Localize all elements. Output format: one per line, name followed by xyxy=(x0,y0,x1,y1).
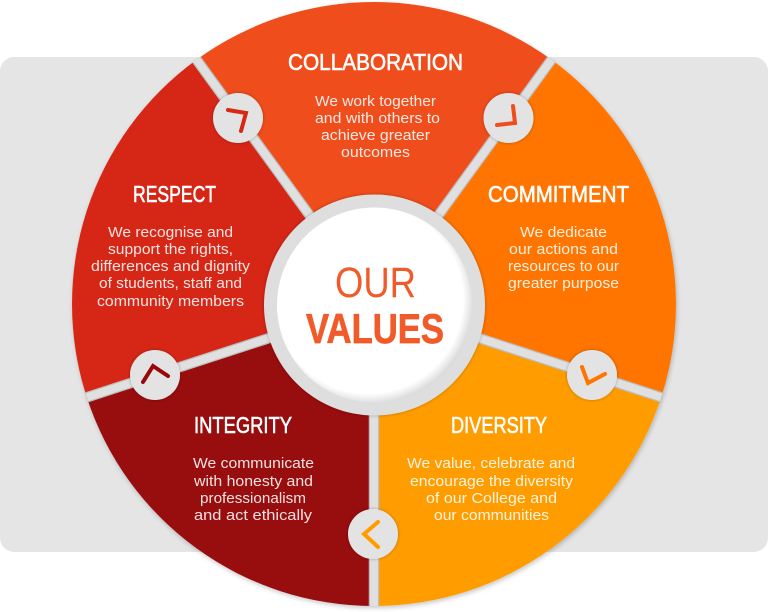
segment: collaboration xyxy=(196,2,552,304)
segment: diversity xyxy=(374,304,661,606)
text block: diversity: of our College and xyxy=(426,491,557,507)
text block: diversity: DIVERSITY xyxy=(451,412,547,438)
text block: collaboration: COLLABORATION xyxy=(288,49,463,75)
text block: commitment: resources to our xyxy=(508,259,619,275)
text block: respect: community members xyxy=(97,294,244,310)
text block: collaboration xyxy=(288,49,463,161)
text block: respect xyxy=(91,181,251,310)
hub title: VALUES xyxy=(306,305,444,352)
segment: commitment xyxy=(374,60,676,397)
text block: respect: support the rights, xyxy=(108,242,233,258)
text block: diversity: We value, celebrate and xyxy=(407,456,575,472)
spoke dividers xyxy=(84,58,664,610)
hub title xyxy=(306,259,444,352)
text block: respect: differences and dignity xyxy=(91,259,251,275)
text block: integrity: with honesty and xyxy=(193,474,313,490)
hub title: OUR xyxy=(335,259,416,307)
text block: commitment: our actions and xyxy=(509,242,618,258)
text block: integrity: professionalism xyxy=(200,491,306,507)
connector: diversity to integrity xyxy=(348,509,398,559)
connector: commitment to diversity xyxy=(567,350,617,400)
segment backgrounds xyxy=(72,2,676,606)
text block: respect: of students, staff and xyxy=(99,276,242,292)
connector: respect to collaboration xyxy=(213,93,263,143)
connector: collaboration to commitment xyxy=(484,93,534,143)
text block: diversity xyxy=(407,412,575,524)
text block: commitment: greater purpose xyxy=(508,276,619,292)
text block: integrity: INTEGRITY xyxy=(194,412,292,438)
text block: commitment: COMMITMENT xyxy=(488,181,629,207)
text block: collaboration: outcomes xyxy=(341,145,410,161)
text block: respect: RESPECT xyxy=(133,181,216,207)
text block: integrity xyxy=(193,412,314,524)
center hub xyxy=(264,194,485,416)
text block: commitment xyxy=(488,181,629,292)
segment: integrity xyxy=(87,304,374,606)
text block: collaboration: and with others to xyxy=(315,111,440,127)
text block: integrity: We communicate xyxy=(193,456,314,472)
text block: integrity: and act ethically xyxy=(194,508,313,524)
values wheel xyxy=(72,2,676,610)
text block: respect: We recognise and xyxy=(108,225,233,241)
text block: diversity: encourage the diversity xyxy=(410,474,574,490)
text block: collaboration: achieve greater xyxy=(321,128,430,144)
text block: collaboration: We work together xyxy=(315,94,436,110)
text block: diversity: our communities xyxy=(434,508,549,524)
segment: respect xyxy=(72,60,374,397)
text block: commitment: We dedicate xyxy=(520,225,607,241)
connector: integrity to respect xyxy=(130,350,180,400)
